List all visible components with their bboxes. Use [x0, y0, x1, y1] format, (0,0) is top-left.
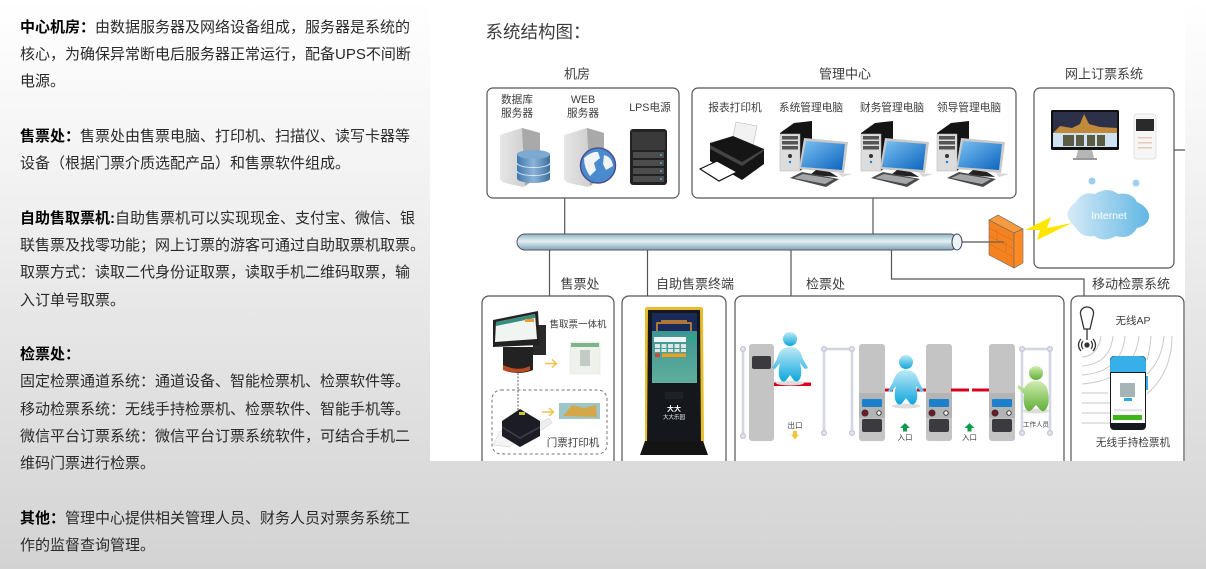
- text block: system description: 核心，为确保异常断电后服务器正常运行，配备UPS不间断: [20, 46, 411, 63]
- barriers: entry: [885, 388, 989, 392]
- label: 报表打印机: 报表打印机: [708, 101, 762, 114]
- text block: system description: 固定检票通道系统：通道设备、智能检票机、检票软件等。: [20, 373, 410, 390]
- panel: 管理中心: [692, 66, 1016, 198]
- label: WEB服务器: 服务器: [567, 106, 599, 120]
- icon: phone: [1134, 114, 1156, 159]
- panel: 机房: 机房: [564, 66, 590, 82]
- icon: computer 1: [780, 121, 852, 187]
- label: 财务管理电脑: 财务管理电脑: [860, 101, 924, 114]
- icon: handheld ticket checker: [1110, 356, 1148, 430]
- icon: lightning bolt: [1025, 217, 1072, 240]
- label: 入口 2: 入口: [962, 433, 977, 442]
- text block: system description: 维码门票进行检票。: [20, 455, 155, 472]
- icon: gate frame right: [1020, 347, 1052, 435]
- dashed box: ticket printer: [492, 390, 607, 454]
- panel: 网上订票系统: 网上订票系统: [1065, 66, 1143, 82]
- label: 系统管理电脑: 系统管理电脑: [779, 101, 843, 114]
- panel: 移动检票系统: 移动检票系统: [1092, 276, 1170, 292]
- icon: website monitor: [1051, 110, 1119, 160]
- panel: 网上订票系统: [1034, 66, 1174, 268]
- wireless signal waves: [1082, 336, 1172, 423]
- text block: system description: 移动检票系统：无线手持检票机、检票软件、智能手机等。: [20, 401, 410, 418]
- icon: printer: [700, 122, 764, 181]
- barrier: exit: [774, 382, 811, 386]
- text block: system description: 售票处：售票处由售票电脑、打印机、扫描仪、读写卡器等: [20, 128, 410, 145]
- label: 工作人员: 工作人员: [1023, 420, 1050, 428]
- label: 出口: 出口: [788, 420, 802, 430]
- panel: 自助售票终端: 自助售票终端: [656, 276, 734, 292]
- label: 数据库服务器: 数据库: [501, 94, 533, 106]
- panel: 检票处: 检票处: [806, 276, 845, 292]
- text block: system description: 其他：管理中心提供相关管理人员、财务人员对票务系统工: [20, 510, 410, 527]
- entry gate post 1: [859, 344, 885, 441]
- arrow: entry 2: [964, 423, 974, 432]
- icon: computer 2: [861, 121, 933, 187]
- icon: firewall: [989, 215, 1023, 268]
- icon: web server: [564, 128, 616, 187]
- person: staff: [1018, 366, 1049, 414]
- text block: system description: 入订单号取票。: [20, 292, 125, 309]
- label: 数据库服务器: 服务器: [501, 106, 533, 120]
- panel: 检票处: [735, 276, 1064, 476]
- label: 售取票一体机: 售取票一体机: [549, 318, 607, 330]
- title: 系统结构图：: [486, 19, 590, 44]
- icon: LPS power unit: [630, 129, 667, 185]
- text block: system description: [20, 19, 425, 554]
- label: 门票打印机: 门票打印机: [547, 436, 600, 449]
- panel: 售票处: [482, 276, 614, 476]
- label: WEB服务器: WEB: [571, 94, 595, 106]
- text block: system description: 设备（根据门票介质选配产品）和售票软件组成。: [20, 155, 350, 172]
- icon: database server: [500, 128, 550, 187]
- text block: system description: 联售票及找零功能；网上订票的游客可通过自助取票机取票。: [20, 237, 425, 254]
- label: LPS电源: LPS电源: [629, 101, 671, 114]
- icon: gate frame: [822, 347, 854, 435]
- text block: system description: 检票处：: [20, 346, 80, 363]
- text block: system description: 电源。: [20, 73, 65, 90]
- panel: 机房: [487, 66, 679, 198]
- label: 领导管理电脑: 领导管理电脑: [937, 101, 1001, 114]
- icon: computer 3: [937, 121, 1009, 187]
- text block: system description: 取票方式：读取二代身份证取票，读取手机二维码取票，输: [20, 264, 410, 281]
- panel: system structure diagram: [430, 0, 1185, 461]
- icon: left rail: [741, 347, 745, 438]
- icon: ticket: [559, 403, 600, 419]
- icon: self-service kiosk: 大大: [667, 404, 681, 413]
- arrow: exit: [791, 431, 799, 440]
- entry gate post 3: [989, 344, 1015, 441]
- text block: system description: 中心机房：由数据服务器及网络设备组成，服务器是系统的: [20, 19, 410, 36]
- dotted link: [517, 373, 519, 410]
- label: 入口 1: 入口: [898, 433, 912, 442]
- label: 无线AP: 无线AP: [1115, 314, 1151, 327]
- arrow: to ticket: [542, 408, 554, 416]
- panel: 移动检票系统: [1071, 276, 1184, 476]
- network bus pipe: [517, 234, 962, 250]
- person: exiting visitor: [772, 332, 808, 386]
- text block: system description: 微信平台订票系统：微信平台订票系统软件，可结合手机二: [20, 428, 410, 445]
- panel: 自助售票终端: [622, 276, 734, 476]
- panel: 管理中心: 管理中心: [819, 66, 871, 82]
- icon: internet cloud: [1067, 178, 1149, 240]
- connecting lines: [550, 150, 1185, 296]
- panel: 售票处: 售票处: [560, 276, 600, 292]
- icon: ticket printer: [493, 409, 552, 447]
- icon: internet cloud: Internet: [1091, 210, 1127, 222]
- text block: system description: 作的监督查询管理。: [20, 537, 155, 554]
- icon: self-service kiosk: 大大乐园: [663, 413, 685, 421]
- text block: system description: 自助售取票机:自助售票机可以实现现金、支付宝、微信、银: [20, 210, 415, 227]
- arrow: to receipt: [545, 360, 556, 368]
- label: 无线手持检票机: 无线手持检票机: [1096, 436, 1170, 449]
- arrow: entry 1: [900, 423, 910, 432]
- icon: wireless AP: [1078, 307, 1096, 351]
- person: entering visitor: [888, 355, 924, 408]
- icon: self-service kiosk: [640, 307, 708, 455]
- icon: ticket POS terminal: [493, 311, 546, 373]
- entry gate post 2: [926, 344, 952, 441]
- icon: printed receipt: [570, 342, 600, 374]
- exit gate post: [749, 344, 774, 441]
